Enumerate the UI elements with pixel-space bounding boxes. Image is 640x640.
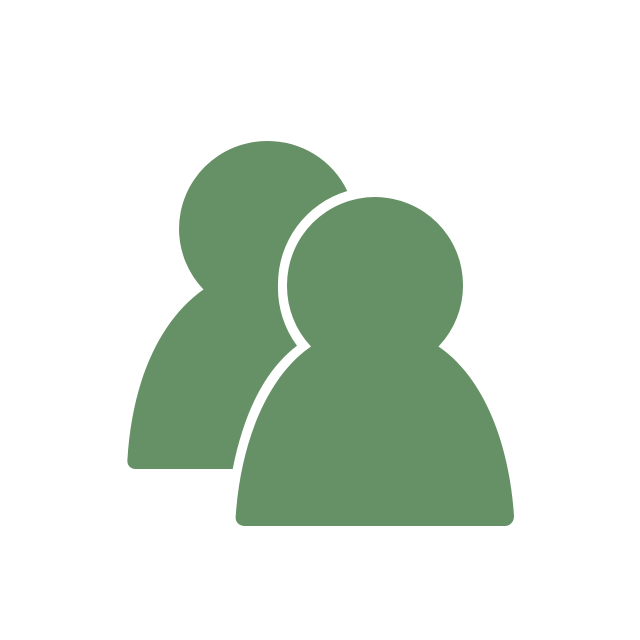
icon: front person xyxy=(236,197,514,526)
icon: back person xyxy=(127,141,347,469)
